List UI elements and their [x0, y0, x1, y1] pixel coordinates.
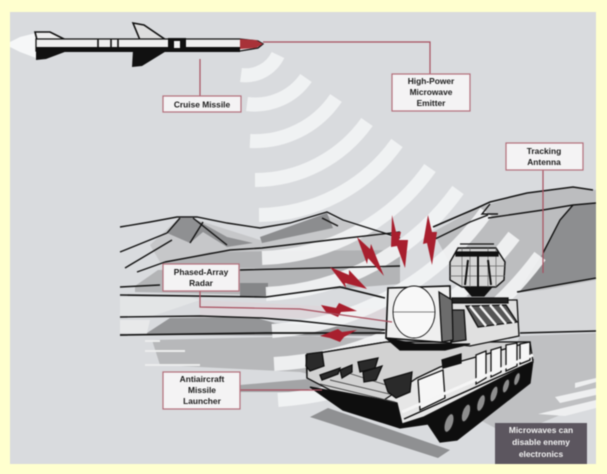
- cruise missile: [10, 23, 263, 67]
- callout: microwaves disable electronics: [495, 423, 587, 464]
- label: high-power microwave emitter: [392, 74, 470, 111]
- bottom mid fin: [132, 50, 168, 67]
- phased-array radar: [386, 286, 470, 350]
- microwave beam: concentric arcs: [241, 55, 540, 400]
- label: tracking antenna: Antenna: [527, 157, 561, 167]
- label: antiaircraft missile launcher: Missile: [188, 385, 216, 395]
- left fading streaks: [145, 340, 200, 366]
- right hills: [433, 187, 596, 436]
- label: phased-array radar: Radar: [189, 278, 214, 288]
- label: high-power microwave emitter: High-Power: [408, 76, 455, 86]
- terrain: hills and mountains: [120, 187, 596, 436]
- missile body: [36, 39, 263, 51]
- label: tracking antenna: [506, 143, 583, 170]
- body underside: [36, 47, 240, 52]
- label: tracking antenna: Tracking: [527, 146, 561, 156]
- nose emitter: [240, 39, 263, 49]
- foreground streaks: [538, 378, 596, 416]
- dark collar: [168, 38, 186, 51]
- callout: microwaves disable electronics: disable enemy: [512, 437, 570, 447]
- lightning bolts: electronic disruption: [320, 215, 437, 342]
- bow plate stripes: [320, 372, 402, 402]
- label: high-power microwave emitter: Microwave: [410, 87, 453, 97]
- driver section details: [306, 352, 412, 398]
- label: antiaircraft missile launcher: Launcher: [183, 396, 222, 406]
- label: antiaircraft missile launcher: [163, 372, 240, 409]
- black hatch: [442, 354, 461, 368]
- callout: microwaves disable electronics: Microwaves can: [509, 425, 573, 435]
- mid-ground grey bands: [120, 250, 400, 396]
- tank: antiaircraft missile launcher: [306, 244, 533, 442]
- label: cruise missile: Cruise Missile: [174, 100, 231, 110]
- side skirt line: [404, 362, 532, 419]
- label: cruise missile: [163, 96, 241, 112]
- callout: microwaves disable electronics: electronics: [519, 449, 563, 459]
- side skirt highlight: [402, 355, 533, 412]
- distant mountains: [150, 213, 400, 262]
- bottom tail fin: [36, 50, 70, 60]
- leader lines: [200, 42, 543, 390]
- road wheels: [442, 371, 522, 434]
- hull side panels: [418, 342, 530, 410]
- top tail fin: [35, 32, 66, 40]
- shadow under tank: [310, 408, 450, 458]
- missile launcher block: [451, 298, 519, 346]
- tracks: [310, 360, 533, 442]
- hull: [306, 342, 533, 424]
- exhaust plume: [10, 33, 36, 58]
- terrain contour lines: [120, 187, 596, 335]
- tracking antenna: [450, 244, 505, 296]
- label: phased-array radar: Phased-Array: [174, 267, 229, 277]
- label: high-power microwave emitter: Emitter: [417, 98, 446, 108]
- body section lines: [98, 39, 118, 49]
- top mid fin: [133, 23, 166, 40]
- hull deck: [307, 342, 530, 400]
- collar window: [174, 41, 180, 48]
- label: antiaircraft missile launcher: Antiaircraft: [180, 374, 225, 384]
- label: phased-array radar: [163, 264, 239, 291]
